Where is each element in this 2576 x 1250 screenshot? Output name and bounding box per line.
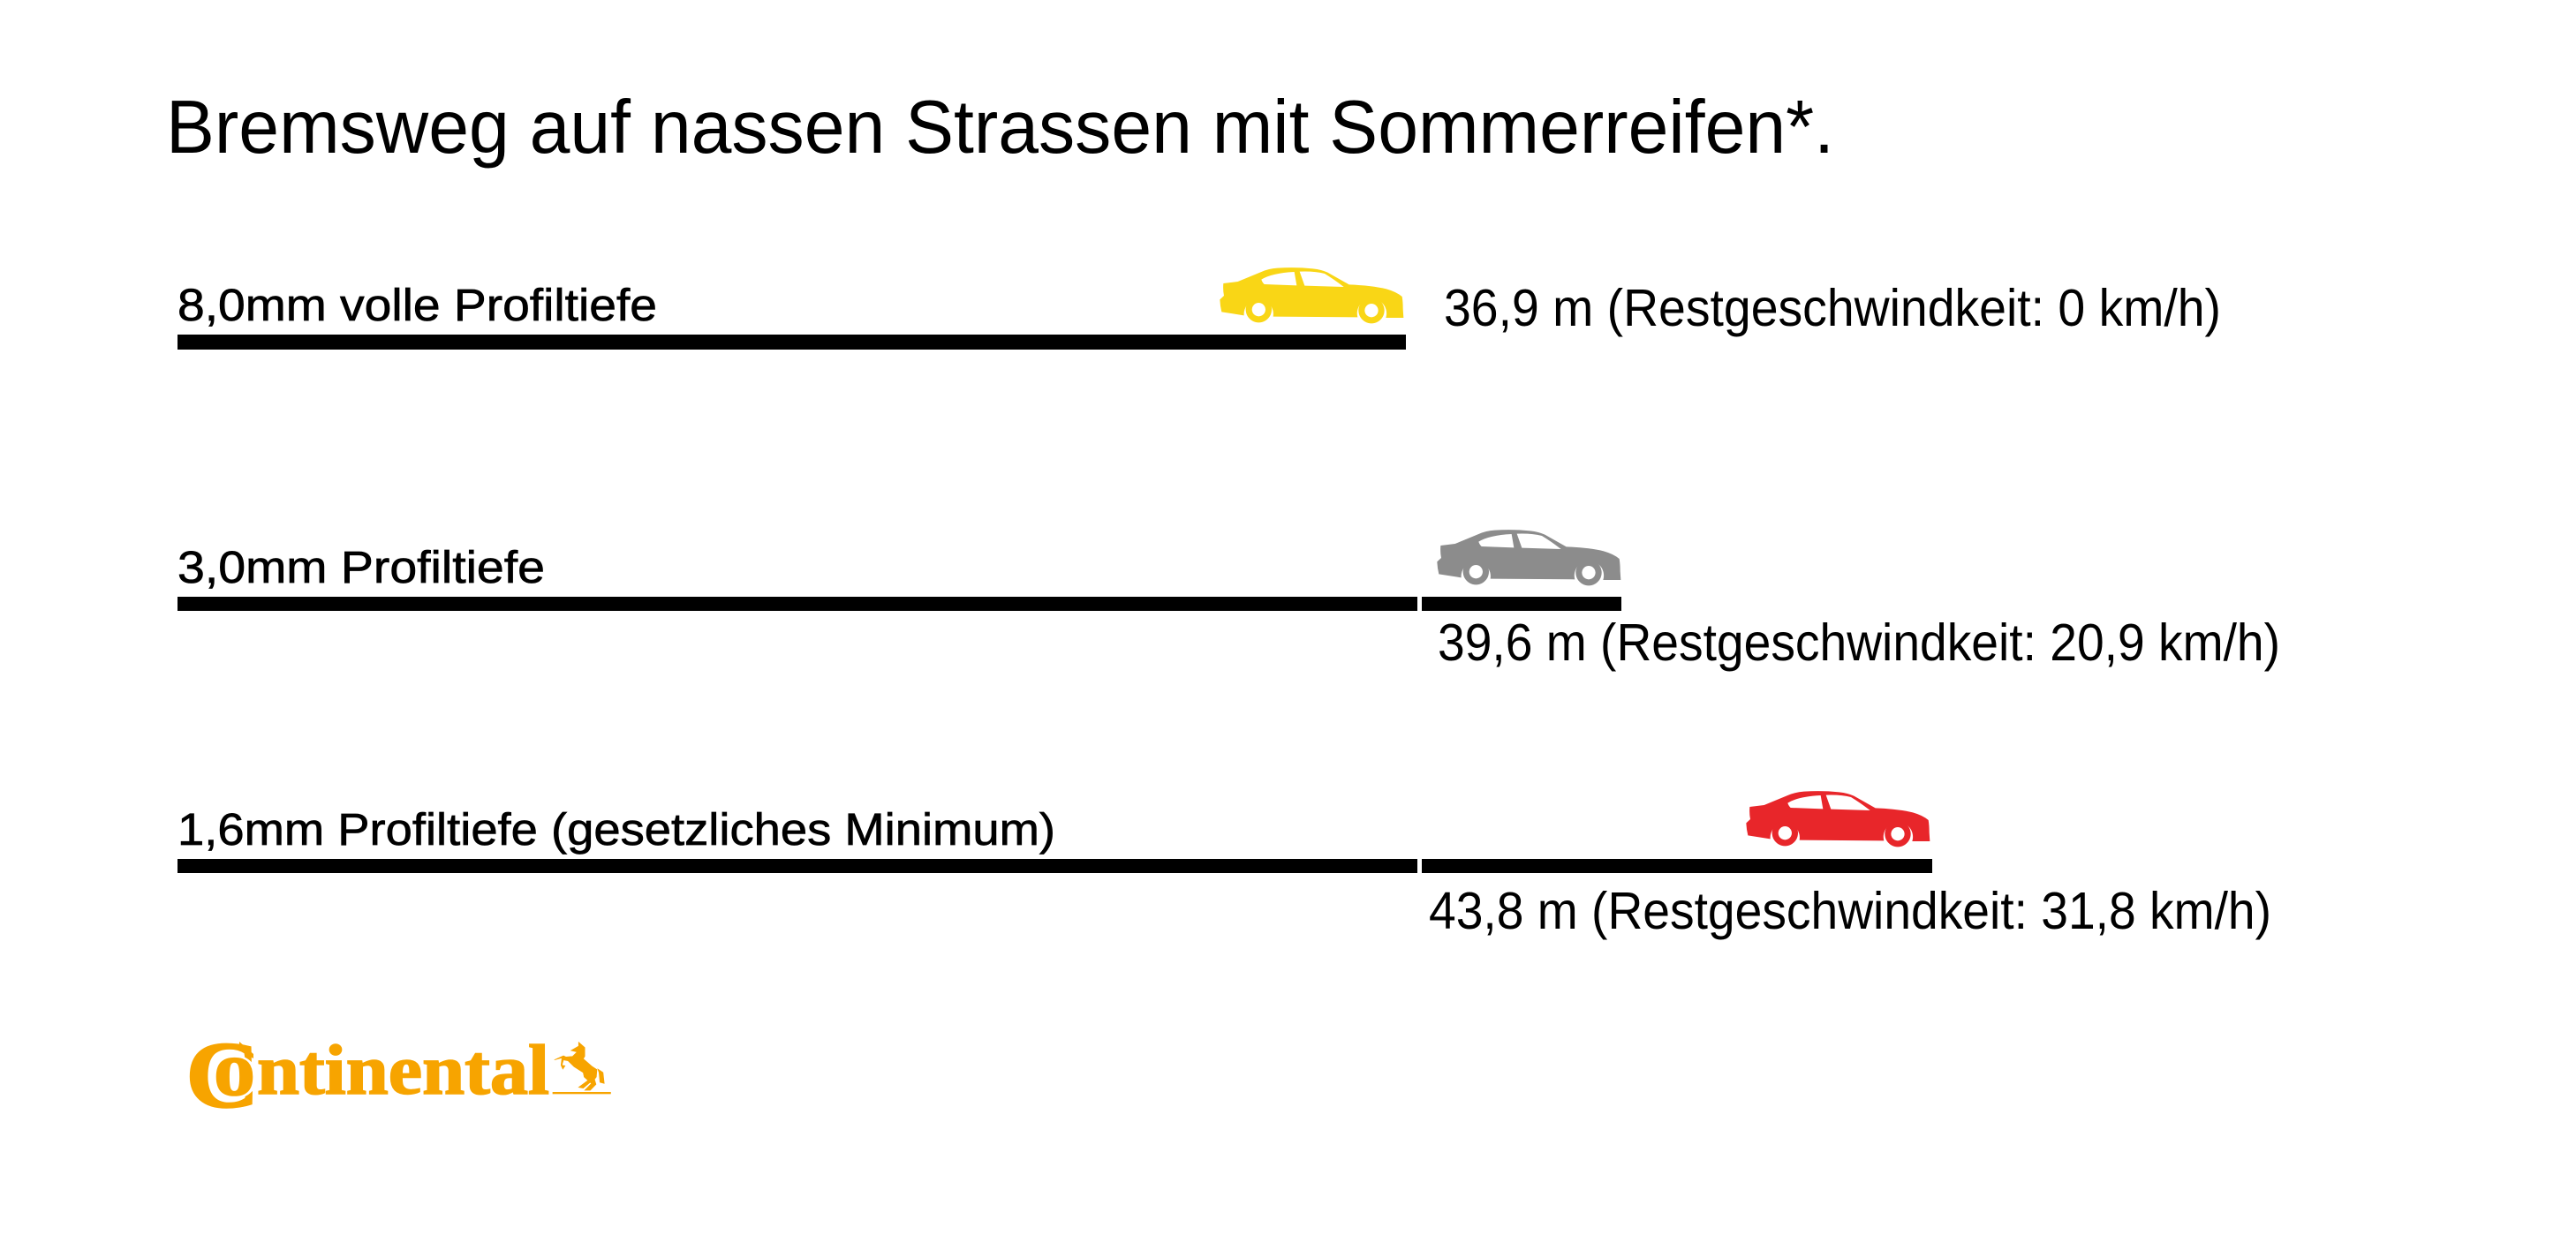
- logo: Continental: C: [185, 1023, 260, 1128]
- row: 1,6 mm tread depth: [178, 791, 2271, 940]
- distance bar: 39,6 m: [178, 597, 1621, 611]
- distance bar: 43,8 m: [178, 859, 1932, 873]
- value: 39,6 m: 39,6 m (Restgeschwindkeit: 20,9 km/h): [1438, 614, 2280, 672]
- title: Bremsweg auf nassen Strassen mit Sommerreifen*.: [166, 86, 1834, 169]
- logo: Continental: o: [214, 1027, 255, 1112]
- icon: yellow car: [1220, 267, 1403, 323]
- logo: Continental: ntinental: [257, 1032, 549, 1110]
- value: 43,8 m: 43,8 m (Restgeschwindkeit: 31,8 km/h): [1429, 882, 2271, 940]
- value: 36,9 m: 36,9 m (Restgeschwindkeit: 0 km/h): [1444, 279, 2221, 337]
- label: 1,6 mm: 1,6mm Profiltiefe (gesetzliches Minimum): [178, 804, 1055, 855]
- label: 8,0 mm: 8,0mm volle Profiltiefe: [178, 280, 657, 330]
- row: 3,0 mm tread depth: [178, 530, 2280, 672]
- logo: Continental: [185, 1023, 610, 1128]
- icon: red car: [1746, 791, 1930, 847]
- icon: grey car: [1437, 530, 1620, 585]
- label: 3,0 mm: 3,0mm Profiltiefe: [178, 542, 545, 592]
- icon: rearing horse: [553, 1043, 610, 1094]
- row: 8,0 mm tread depth: [178, 267, 2221, 350]
- distance bar: 36,9 m: [178, 335, 1406, 350]
